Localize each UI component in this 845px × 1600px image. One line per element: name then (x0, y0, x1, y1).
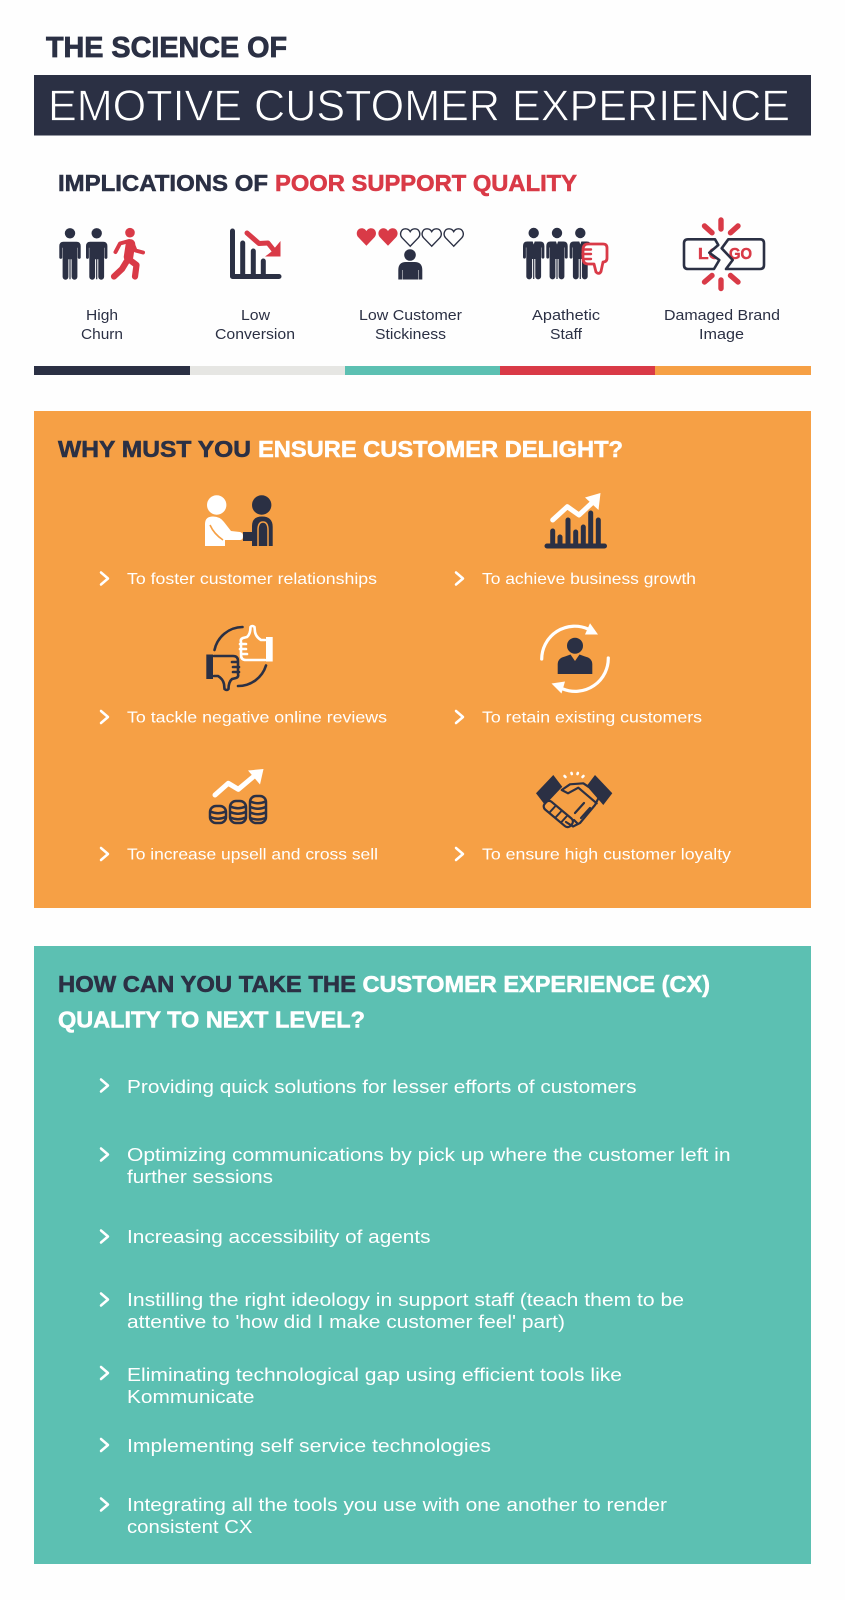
heading: how can you take the customer experience (cx) quality to next level: HOW CAN YOU TAKE THE (58, 971, 356, 997)
panel: why must you ensure customer delight (34, 411, 811, 908)
item: implementing self service technologies: Implementing self service technologies (127, 1436, 491, 1456)
item: to achieve business growth: To achieve business growth (482, 571, 696, 588)
title banner: emotive customer experience: EMOTIVE CUSTOMER EXPERIENCE (48, 83, 790, 131)
implication: low conversion (215, 231, 295, 343)
implication: low conversion: Low (241, 307, 270, 324)
heading: why must you ensure customer delight: ENSURE CUSTOMER DELIGHT? (258, 436, 623, 462)
implication: high churn (59, 228, 143, 343)
heading: why must you ensure customer delight (58, 436, 623, 462)
heading: why must you ensure customer delight: WHY MUST YOU (58, 436, 251, 462)
implication: low conversion: Conversion (215, 326, 295, 343)
icon: broken logo with red rays (684, 220, 764, 288)
heading: implications of poor support quality: POOR SUPPORT QUALITY (275, 170, 577, 196)
title: the science of: THE SCIENCE OF (46, 32, 287, 64)
item: instilling the right ideology (101, 1290, 684, 1332)
icon: customer with retention arrows (542, 623, 608, 694)
icon: people with one walking away (59, 228, 143, 280)
item: to increase upsell and cross sell: To increase upsell and cross sell (127, 846, 378, 864)
item: optimizing communications: further sessions (127, 1167, 273, 1187)
heading: how can you take the customer experience (cx) quality to next level: QUALITY TO NEXT LEVEL? (58, 1006, 365, 1032)
icon: falling bar chart (232, 231, 280, 276)
implication: apathetic staff: Apathetic (532, 307, 601, 324)
heading: how can you take the customer experience (cx) quality to next level (58, 971, 710, 1032)
implication: low customer stickiness (357, 228, 463, 343)
implication: apathetic staff: Staff (550, 326, 583, 343)
icon: coin stacks with rising arrow (210, 769, 266, 823)
item: integrating all the tools: consistent CX (127, 1517, 252, 1537)
implication: apathetic staff (523, 228, 607, 343)
implication: high churn: High (86, 307, 118, 324)
item: to retain existing customers: To retain existing customers (482, 710, 702, 726)
icon: two people shaking hands (205, 495, 273, 546)
heading: how can you take the customer experience (cx) quality to next level: CUSTOMER EXPERIENCE (CX) (362, 971, 710, 997)
icon: hearts above a person (357, 228, 463, 280)
implication: damaged brand image: Damaged Brand (664, 307, 780, 324)
item: instilling the right ideology: attentive to 'how did I make customer feel' part) (127, 1312, 565, 1332)
item: eliminating technological gap (101, 1365, 622, 1407)
colour bar divider (34, 366, 811, 375)
implication: low customer stickiness: Low Customer (359, 307, 462, 324)
icon: growth chart with arrow (547, 493, 604, 546)
icon: thumbs up and thumbs down in a cycle (206, 626, 273, 690)
item: integrating all the tools (101, 1495, 667, 1537)
implication: damaged brand image: Image (699, 326, 744, 343)
implication: low customer stickiness: Stickiness (375, 326, 446, 343)
icon: suited staff with thumbs down (523, 228, 607, 279)
icon: broken logo with red rays: LO (698, 246, 722, 263)
item: instilling the right ideology: Instilling the right ideology in support staff (teach them to be (127, 1290, 684, 1310)
item: providing quick solutions: Providing quick solutions for lesser efforts of customers (127, 1077, 636, 1097)
item: eliminating technological gap: Kommunicate (127, 1387, 254, 1407)
item: eliminating technological gap: Eliminating technological gap using efficient tools like (127, 1365, 622, 1385)
icon: broken logo with red rays: GO (729, 246, 752, 263)
item: to foster customer relationships: To foster customer relationships (127, 571, 377, 588)
heading: implications of poor support quality: IMPLICATIONS OF (58, 170, 268, 196)
item: to tackle negative online reviews: To tackle negative online reviews (127, 710, 387, 726)
implication: high churn: Churn (81, 326, 123, 343)
item: to ensure high customer loyalty: To ensure high customer loyalty (482, 846, 731, 864)
panel: how can you take cx quality to next level (34, 946, 811, 1564)
implication: damaged brand image (664, 220, 780, 343)
item: integrating all the tools: Integrating all the tools you use with one another to render (127, 1495, 667, 1515)
heading: implications of poor support quality (58, 170, 577, 196)
item: optimizing communications: Optimizing communications by pick up where the customer left in (127, 1145, 730, 1165)
item: optimizing communications (101, 1145, 730, 1187)
item: increasing accessibility of agents: Increasing accessibility of agents (127, 1227, 430, 1247)
icon: handshake (536, 773, 612, 829)
